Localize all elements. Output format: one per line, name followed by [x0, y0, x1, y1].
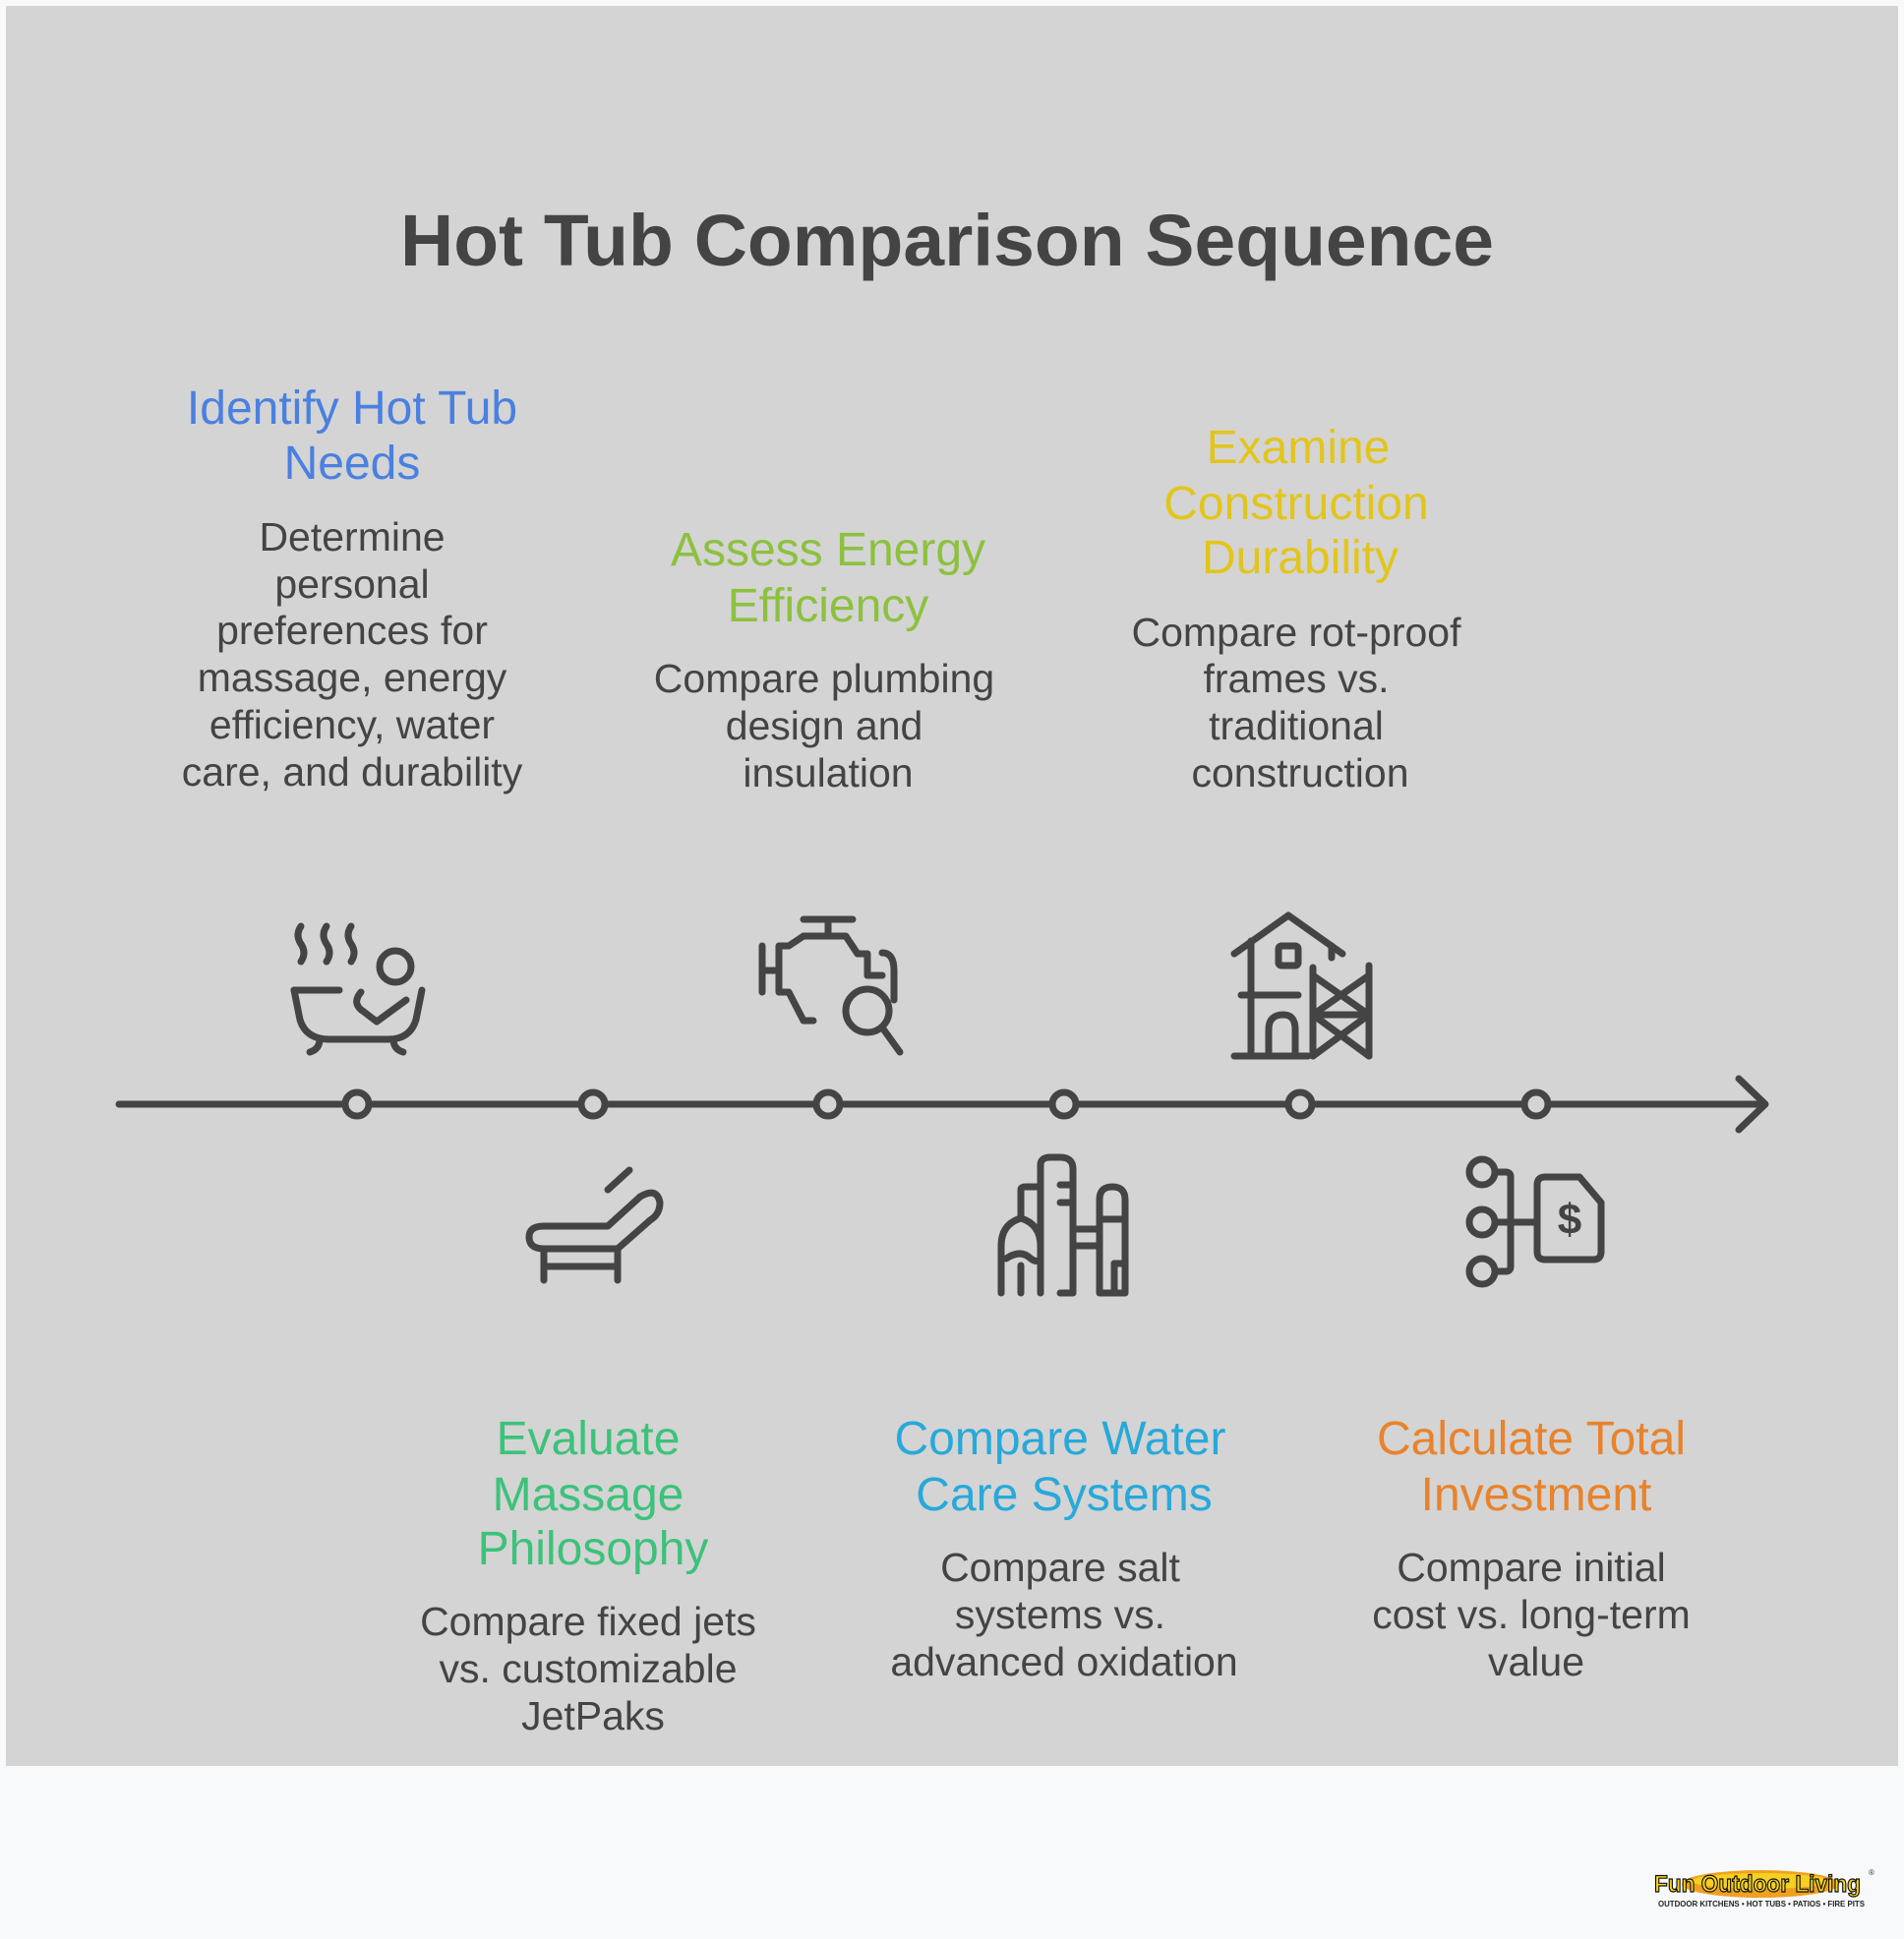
- step 4 text: JetPaks: [521, 1693, 665, 1738]
- step 1 text: Identify Hot Tub: [187, 382, 517, 435]
- step 1 text: Needs: [284, 438, 420, 490]
- step 3 text: traditional: [1209, 703, 1384, 748]
- step 5 text: systems vs.: [955, 1592, 1165, 1637]
- step 6 text: Investment: [1421, 1469, 1651, 1521]
- title: Hot Tub Comparison Sequence: [400, 200, 1494, 281]
- step 4 text: Evaluate: [497, 1413, 680, 1465]
- icon: massage table: [529, 1170, 660, 1280]
- step 2 text: [654, 524, 994, 795]
- step 3 text: Durability: [1202, 532, 1398, 584]
- step 1 text: personal: [274, 561, 430, 607]
- icon: bathtub: [294, 926, 422, 1052]
- logo: [1654, 1868, 1874, 1909]
- step 4 text: Philosophy: [478, 1523, 708, 1575]
- step 4 text: Compare fixed jets: [420, 1599, 756, 1644]
- icon: cost diagram: $: [1558, 1196, 1581, 1244]
- logo: Fun Outdoor Living: [1654, 1871, 1861, 1898]
- step 5 text: [890, 1413, 1238, 1684]
- timeline arrow: [119, 1079, 1765, 1130]
- step 3 text: Construction: [1163, 478, 1429, 530]
- step 2 text: Efficiency: [728, 580, 928, 632]
- step 5 text: Compare Water: [895, 1413, 1226, 1465]
- logo: ®: [1869, 1868, 1874, 1877]
- step 3 text: construction: [1191, 750, 1409, 795]
- step 1 text: massage, energy: [198, 655, 507, 700]
- step 3 text: frames vs.: [1203, 656, 1390, 701]
- step 6 text: value: [1488, 1639, 1584, 1684]
- step 4 text: [420, 1413, 756, 1738]
- step 6 text: Calculate Total: [1377, 1413, 1686, 1465]
- icon: water treatment: [1001, 1157, 1125, 1293]
- step 5 text: Care Systems: [916, 1469, 1213, 1521]
- icon: house with scaffolding: [1234, 915, 1369, 1056]
- step 1 text: preferences for: [216, 608, 488, 653]
- step 3 text: Compare rot-proof: [1132, 610, 1461, 655]
- step 1 text: efficiency, water: [209, 702, 495, 747]
- step 2 text: Assess Energy: [671, 524, 985, 576]
- step 4 text: Massage: [493, 1469, 684, 1521]
- icon: pipe with magnifier: [762, 919, 900, 1052]
- step 2 text: insulation: [743, 750, 914, 795]
- step 1 text: Determine: [259, 514, 446, 559]
- step 6 text: [1372, 1413, 1691, 1684]
- step 5 text: Compare salt: [940, 1545, 1181, 1590]
- step 5 text: advanced oxidation: [890, 1639, 1238, 1684]
- logo: OUTDOOR KITCHENS • HOT TUBS • PATIOS • FIRE PITS: [1658, 1900, 1866, 1909]
- step 2 text: Compare plumbing: [654, 656, 994, 701]
- step 6 text: Compare initial: [1397, 1545, 1666, 1590]
- step 1 text: care, and durability: [182, 749, 523, 794]
- step 1 text: [182, 382, 523, 794]
- step 3 text: [1132, 422, 1461, 795]
- step 3 text: Examine: [1207, 422, 1390, 474]
- step 4 text: vs. customizable: [439, 1646, 738, 1691]
- icon: cost diagram: [1469, 1159, 1601, 1284]
- step 6 text: cost vs. long-term: [1372, 1592, 1691, 1637]
- step 2 text: design and: [726, 703, 922, 748]
